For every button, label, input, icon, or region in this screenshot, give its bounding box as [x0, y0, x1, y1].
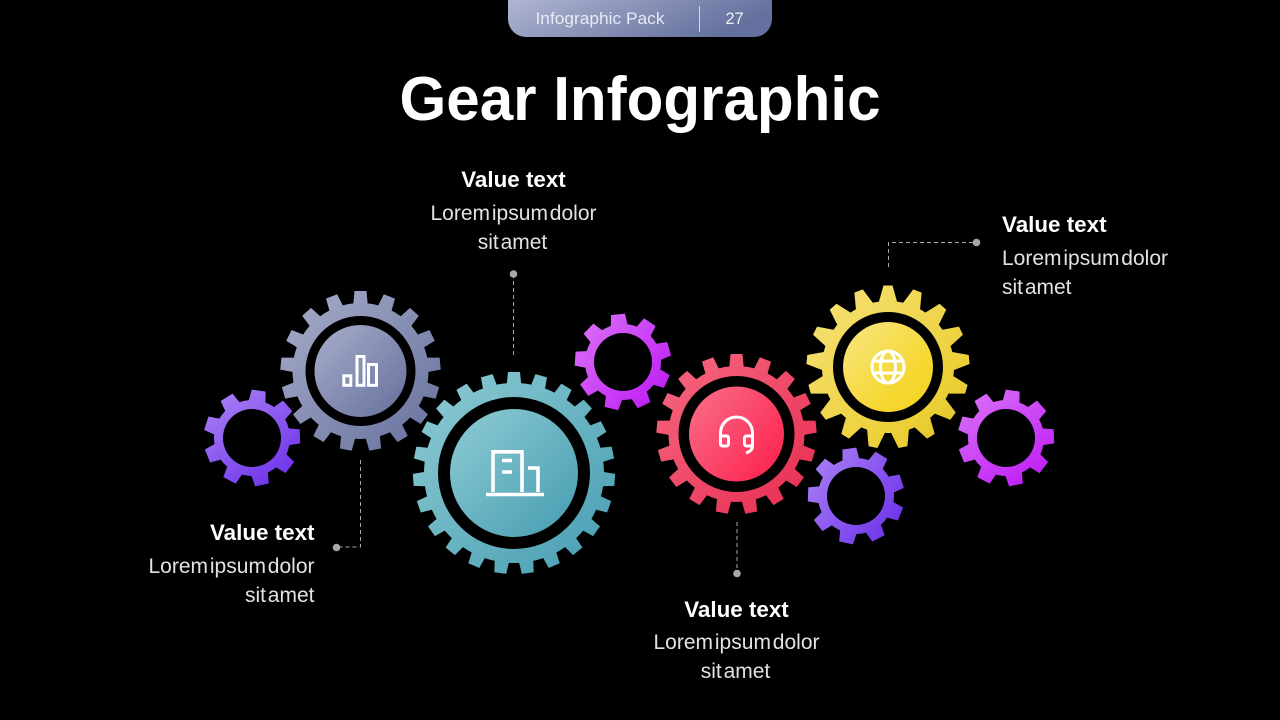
- header tab: 27: [725, 10, 744, 28]
- icon: globe: [872, 351, 904, 383]
- text block: headset gear: sit amet: [701, 660, 770, 683]
- text block: building gear: Lorem ipsum dolor: [430, 202, 597, 225]
- text block: headset gear: Value text: [684, 597, 789, 622]
- icon: bar chart: [344, 356, 376, 385]
- text block: bar chart gear: Lorem ipsum dolor: [148, 555, 315, 578]
- text block: bar chart gear: [148, 520, 315, 607]
- small gear: purple bottom: [808, 448, 904, 544]
- text block: building gear: sit amet: [478, 231, 547, 254]
- small gear: magenta right: [958, 390, 1054, 486]
- icon: headset: [720, 417, 752, 453]
- text block: globe gear: Value text: [1002, 212, 1107, 237]
- text block: bar chart gear: sit amet: [245, 584, 315, 607]
- text block: globe gear: [1002, 212, 1168, 299]
- text block: building gear: [430, 167, 597, 254]
- small gear: purple left: [204, 390, 300, 486]
- text block: building gear: Value text: [461, 167, 566, 192]
- title: Gear Infographic: [400, 65, 880, 134]
- text block: headset gear: [654, 597, 820, 683]
- connector: headset gear: [733, 522, 741, 577]
- gear: teal with building icon: [411, 370, 617, 576]
- small gear: magenta top: [574, 314, 671, 410]
- text block: bar chart gear: Value text: [210, 520, 315, 545]
- gear: red with headset icon: [654, 352, 818, 516]
- connector: bar chart gear: [333, 460, 360, 551]
- connector: globe gear: [888, 239, 980, 267]
- connector: building gear: [510, 270, 517, 355]
- icon: building: [486, 452, 544, 494]
- gear: yellow with globe icon: [805, 284, 971, 450]
- header tab: Infographic Pack: [536, 10, 665, 28]
- text block: headset gear: Lorem ipsum dolor: [654, 631, 820, 654]
- text block: globe gear: Lorem ipsum dolor: [1002, 247, 1168, 270]
- text block: globe gear: sit amet: [1002, 276, 1072, 299]
- header tab: [508, 0, 772, 37]
- gear: slate with bar chart icon: [278, 289, 442, 453]
